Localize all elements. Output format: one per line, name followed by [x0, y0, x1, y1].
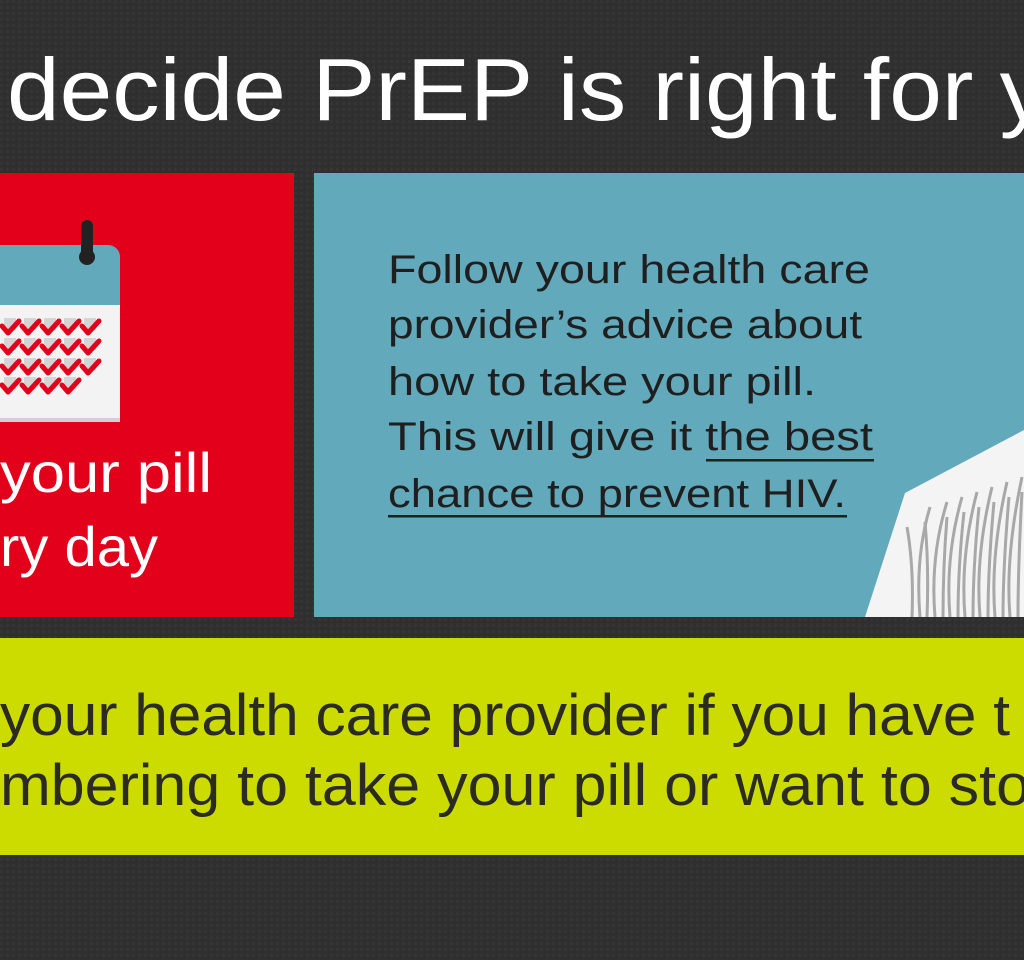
text: take pill every day: your pill — [0, 441, 212, 504]
text: advice: how to take your pill. — [388, 360, 816, 404]
illustration: person figure — [860, 425, 1024, 625]
text: talk to provider: your health care provider if you have t — [0, 683, 1010, 748]
text: talk to provider: mbering to take your pill or want to sto — [0, 753, 1024, 818]
text: advice: This will give it the best — [388, 415, 873, 459]
title: decide PrEP is right for y — [7, 40, 1024, 139]
text: talk to provider — [0, 683, 1024, 818]
text: advice: chance to prevent HIV. — [388, 472, 846, 516]
text: advice: provider’s advice about — [388, 303, 862, 347]
panel: green callout — [0, 638, 1024, 855]
panel: blue advice — [314, 173, 1024, 625]
text: take pill every day — [0, 441, 212, 578]
text: advice — [388, 248, 874, 518]
text: advice: Follow your health care — [388, 248, 870, 292]
icon: calendar — [0, 220, 120, 422]
panel: red take pill — [0, 173, 294, 617]
text: take pill every day: ry day — [0, 515, 158, 578]
